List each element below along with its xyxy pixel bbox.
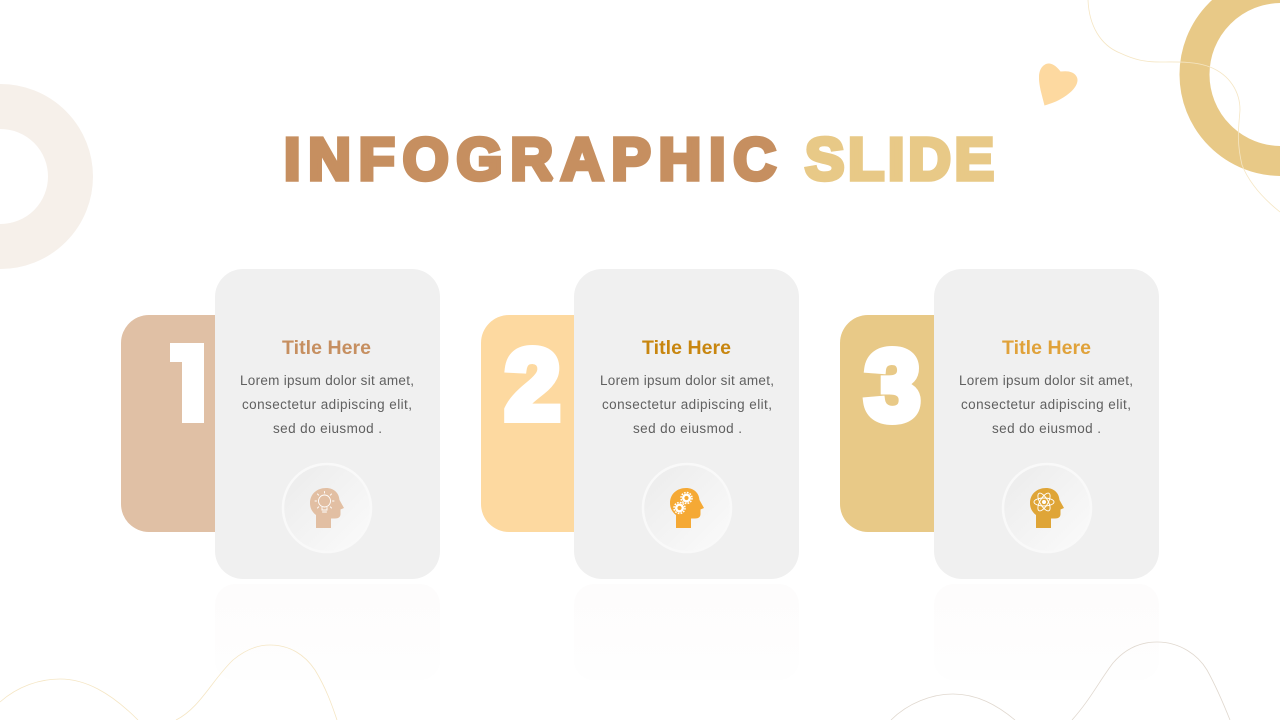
decorative curve: bottom left xyxy=(0,645,337,720)
icon: heart xyxy=(1039,63,1078,106)
number tab 2 xyxy=(481,315,611,532)
icon well 3 xyxy=(1003,464,1091,552)
title: SLIDE xyxy=(805,126,994,192)
card title 1: Title Here xyxy=(282,337,371,359)
card text 3: consectetur adipiscing elit, xyxy=(961,397,1131,412)
decorative curve: top right xyxy=(1088,0,1280,212)
card text 3: Lorem ipsum dolor sit amet, xyxy=(959,373,1133,388)
decorative ring: left xyxy=(0,106,70,246)
number 1: 1 xyxy=(159,319,221,445)
decorative ring: top right xyxy=(1194,0,1280,161)
card text 1 xyxy=(240,373,414,436)
panel: step 2 xyxy=(481,269,799,680)
card text 2: sed do eiusmod . xyxy=(633,421,742,436)
card text 3 xyxy=(959,373,1133,436)
card 3 xyxy=(934,269,1159,579)
icon well 1 xyxy=(283,464,371,552)
decorative curve: bottom right xyxy=(891,642,1230,720)
card text 1: sed do eiusmod . xyxy=(273,421,382,436)
number 2: 2 xyxy=(505,329,560,441)
card text 1: consectetur adipiscing elit, xyxy=(242,397,412,412)
icon well 2 xyxy=(643,464,731,552)
card title 3: Title Here xyxy=(1002,337,1091,359)
title xyxy=(284,126,994,192)
reflection 1 xyxy=(215,584,440,680)
title: INFOGRAPHIC xyxy=(284,126,776,192)
number tab 3 xyxy=(840,315,970,532)
reflection 2 xyxy=(574,584,799,680)
reflection 3 xyxy=(934,584,1159,680)
icon: head with atom xyxy=(1030,488,1064,528)
panel: step 1 xyxy=(121,269,440,579)
card text 3: sed do eiusmod . xyxy=(992,421,1101,436)
card 2 xyxy=(574,269,799,579)
panel: step 3 xyxy=(840,269,1159,680)
card text 1: Lorem ipsum dolor sit amet, xyxy=(240,373,414,388)
number 3: 3 xyxy=(865,330,920,442)
number tab 1 xyxy=(121,315,251,532)
icon: head with light bulb xyxy=(310,488,344,528)
icon: head with gears xyxy=(670,488,704,528)
card 1 xyxy=(215,269,440,579)
card text 2 xyxy=(600,373,774,436)
card title 2: Title Here xyxy=(642,337,731,359)
card text 2: consectetur adipiscing elit, xyxy=(602,397,772,412)
card text 2: Lorem ipsum dolor sit amet, xyxy=(600,373,774,388)
